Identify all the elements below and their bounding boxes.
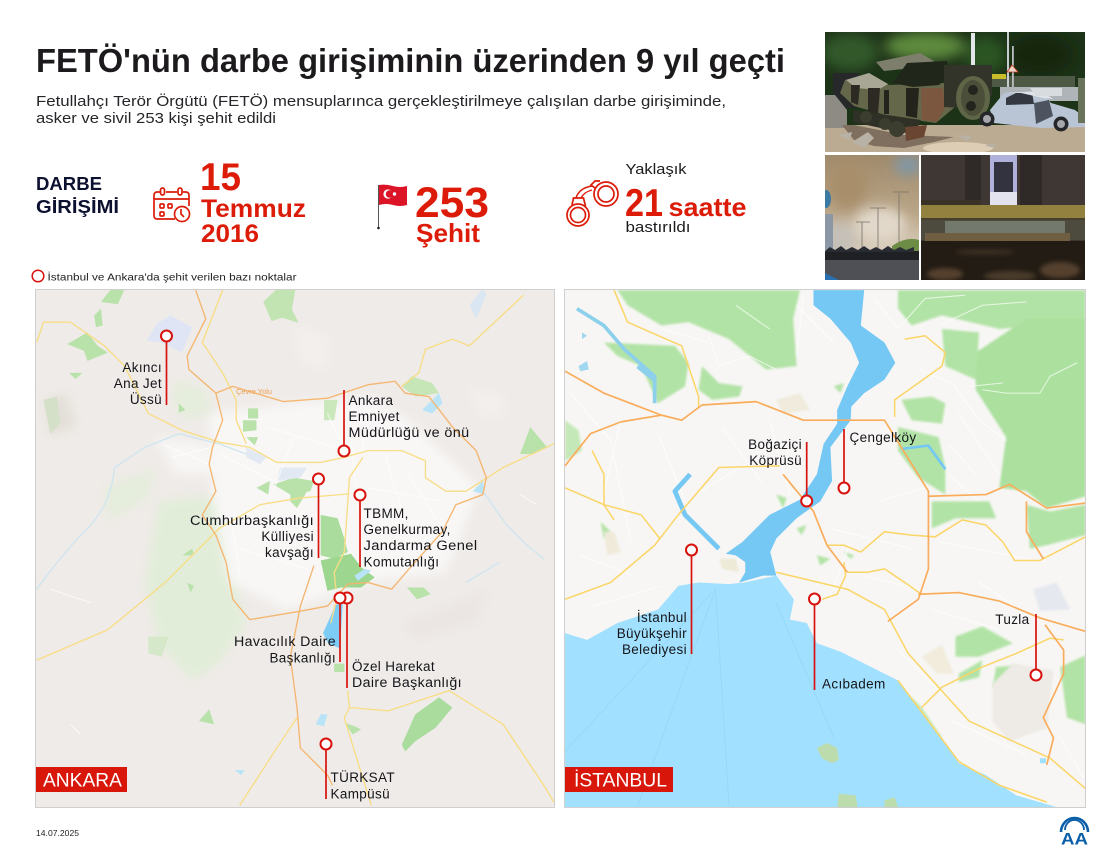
icon: AA logo: AA: [1061, 830, 1088, 848]
callout: Ankara Emniyet: [338, 390, 470, 456]
legend: İstanbul ve Ankara'da şehit verilen bazı noktalar: [48, 270, 297, 284]
road name: Çevre Yolu: [236, 389, 272, 396]
title: FETÖ'nün darbe girişiminin üzerinden 9 yıl geçti: [36, 42, 785, 79]
subtitle text: Fetullahçı Terör Örgütü (FETÖ) mensuplarınca gerçekleştirilmeye çalışılan darbe girişiminde,: [36, 92, 726, 110]
callout: Cumhurbaşkanlığı: Cumhurbaşkanlığı: [190, 513, 314, 528]
callout: Boğaziçi Köprüsü: Köprüsü: [749, 453, 802, 468]
callout: Cumhurbaşkanlığı: Külliyesi: [261, 529, 314, 544]
panel: Ankara map: [36, 288, 554, 808]
photo: Bosphorus bridge crowd: [921, 155, 1085, 281]
icon: handcuffs: [567, 181, 618, 226]
map greens: [565, 290, 1086, 745]
callout: Ankara Emniyet: Müdürlüğü ve önü: [348, 425, 470, 440]
armored vehicle: [840, 73, 955, 123]
city tag: Ankara: ANKARA: [43, 770, 122, 792]
stat: date: [200, 156, 306, 248]
callout: Çengelköy: [838, 429, 916, 494]
icon: calendar: [154, 188, 190, 222]
stat: martyrs: 253: [415, 179, 489, 227]
map roads: [37, 290, 554, 806]
stat: martyrs: [415, 179, 489, 248]
callout: Acıbadem: Acıbadem: [822, 676, 886, 692]
callout: Havacılık: Havacılık Daire: [234, 634, 336, 649]
callout: Ankara Emniyet: Ankara: [348, 393, 394, 408]
heading: darbe girişimi: [36, 174, 119, 217]
map greens: [44, 289, 547, 751]
callout: TÜRKSAT: Kampüsü: [330, 786, 390, 802]
callout: Havacılık: [234, 592, 346, 666]
stat: duration: saatte: [668, 192, 746, 222]
callout: İstanbul Büyükşehir Belediyesi: [617, 544, 697, 657]
legend: [32, 270, 297, 284]
callout: TBMM: Jandarma Genel: [364, 538, 478, 553]
callout: Havacılık: Başkanlığı: [269, 650, 336, 666]
date: 14.07.2025: [36, 828, 79, 838]
stat: duration: bastırıldı: [626, 219, 690, 236]
callout: TÜRKSAT: [320, 738, 395, 802]
callout: Tuzla: [995, 612, 1042, 680]
callout: İstanbul Büyükşehir Belediyesi: Büyükşehir: [617, 626, 687, 641]
map beige patches: [604, 393, 1070, 741]
stat: date: 2016: [201, 220, 259, 248]
callout: TÜRKSAT: TÜRKSAT: [330, 770, 395, 785]
callout: Akıncı: Üssü: [130, 392, 162, 407]
callout: Çengelköy: Çengelköy: [850, 430, 916, 445]
callout: Özel Harekat: Özel Harekat: [352, 659, 435, 674]
callout: Boğaziçi Köprüsü: [748, 437, 812, 506]
callout: İstanbul Büyükşehir Belediyesi: Belediyesi: [622, 642, 687, 657]
stat: date: Temmuz: [201, 195, 306, 223]
callout: Acıbadem: [809, 594, 886, 692]
callout: İstanbul Büyükşehir Belediyesi: İstanbul: [637, 610, 687, 625]
heading: darbe girişimi: GİRİŞİMİ: [36, 197, 119, 217]
heading: darbe girişimi: DARBE: [36, 174, 102, 194]
callout: TBMM: Genelkurmay,: [364, 522, 451, 537]
callout: TBMM: [354, 490, 478, 570]
callout: Akıncı: Akıncı: [122, 360, 162, 375]
callout: Akıncı: [114, 330, 172, 407]
city tag: İstanbul: İSTANBUL: [574, 770, 667, 792]
stat: date: 15: [200, 156, 241, 199]
callout: Cumhurbaşkanlığı: [190, 474, 324, 560]
icon: Turkish flag: [377, 185, 407, 229]
callout: Akıncı: Ana Jet: [114, 376, 162, 391]
stat: duration: Yaklaşık: [626, 161, 687, 178]
stat: martyrs: Şehit: [416, 218, 480, 248]
callout: Boğaziçi Köprüsü: Boğaziçi: [748, 437, 802, 452]
map roads: [565, 290, 1086, 802]
callout: Özel Harekat: [342, 592, 462, 690]
callout: Tuzla: Tuzla: [995, 612, 1030, 627]
photo: destroyed armored vehicle: [822, 32, 1088, 154]
map streets: [736, 294, 1078, 627]
photo: smoke and crowd: [820, 155, 922, 280]
map streets: [50, 413, 537, 735]
callout: TBMM: Komutanlığı: [364, 554, 439, 570]
map base: Istanbul terrain: [565, 290, 1086, 807]
callout: TBMM: TBMM,: [364, 506, 409, 521]
map base: Ankara terrain: [37, 288, 554, 806]
stat: duration: 21: [625, 182, 663, 225]
callout: Özel Harekat: Daire Başkanlığı: [352, 675, 462, 690]
panel: Istanbul map: [564, 290, 1086, 808]
map islands: [817, 743, 898, 807]
callout: Ankara Emniyet: Emniyet: [348, 409, 400, 424]
subtitle text: asker ve sivil 253 kişi şehit edildi: [36, 111, 276, 127]
map water: [565, 576, 1057, 807]
stat: duration: [625, 161, 746, 236]
crushed car: [990, 92, 1088, 128]
map water: [147, 288, 486, 775]
subtitle text: [36, 92, 726, 127]
icon: AA logo: [1061, 818, 1088, 848]
callout: Cumhurbaşkanlığı: kavşağı: [265, 545, 314, 560]
